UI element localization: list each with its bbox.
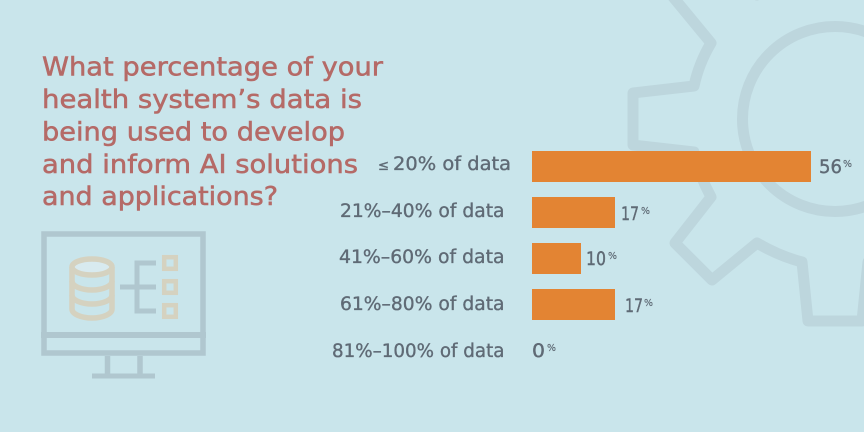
row: 41-60%: [339, 243, 617, 274]
row: up to 20%: 20% of data: [393, 154, 511, 175]
row: 61-80%: [340, 289, 653, 320]
row: 61-80%: 17: [625, 295, 643, 317]
title: being used to develop: [42, 118, 345, 148]
row: 81-100%: %: [547, 343, 556, 354]
title: and applications?: [42, 182, 278, 212]
title: and inform AI solutions: [42, 150, 358, 180]
row: 21-40%: 17: [621, 203, 639, 225]
row: up to 20%: [378, 151, 852, 182]
row: up to 20%: 56: [819, 156, 842, 178]
row: 41-60%: %: [608, 251, 617, 262]
title: [42, 52, 383, 212]
monitor frame: [41, 234, 206, 376]
row: 81-100%: 0: [532, 340, 545, 362]
row: 41-60%: 41%–60% of data: [339, 247, 504, 268]
list squares: [164, 257, 176, 317]
row: 21-40%: %: [641, 206, 650, 217]
row: 21-40%: [340, 197, 650, 228]
icon: monitor with database: [41, 234, 206, 376]
row: 61-80%: %: [644, 298, 653, 309]
row: up to 20%: %: [843, 159, 852, 170]
title: What percentage of your: [42, 52, 383, 82]
row: 21-40%: 21%–40% of data: [340, 201, 504, 222]
icon: gear: [633, 0, 864, 321]
row: 41-60%: 10: [586, 248, 606, 270]
bar chart: [332, 151, 852, 362]
tree connector: [120, 263, 156, 311]
row: 81-100%: 81%–100% of data: [332, 341, 504, 362]
row: up to 20%: ≤: [378, 158, 389, 174]
title: health system’s data is: [42, 85, 362, 115]
database cylinder: [72, 259, 112, 318]
row: 61-80%: 61%–80% of data: [340, 294, 504, 315]
